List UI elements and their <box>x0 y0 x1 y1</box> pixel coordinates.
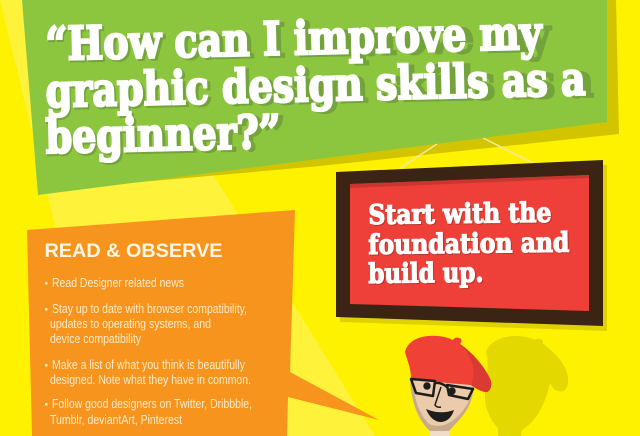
light ray background <box>0 0 375 436</box>
panel: framed red sign <box>336 160 607 331</box>
sign text: Start with the <box>368 198 552 231</box>
title text <box>45 6 586 164</box>
beret shading <box>460 344 491 392</box>
sign text shadow <box>369 199 571 291</box>
bullet list: Follow good designers on Twitter, Dribbble, <box>52 396 252 411</box>
sign text: foundation and <box>368 228 570 261</box>
bullet list: Tumblr, deviantArt, Pinterest <box>50 412 182 427</box>
sign text shadow: build up. <box>369 259 485 291</box>
panel: green title banner <box>22 0 607 195</box>
sign text: build up. <box>368 258 484 290</box>
sign text shadow: Start with the <box>369 199 553 232</box>
face <box>410 378 474 436</box>
panel: read and observe speech bubble <box>27 210 379 436</box>
bullet list: updates to operating systems, and <box>50 316 211 331</box>
title shadow: “How can I improve my <box>46 8 552 73</box>
title shadow <box>46 8 594 166</box>
sign text shadow: foundation and <box>369 229 571 262</box>
character shadow <box>485 336 568 436</box>
bullet list: Make a list of what you think is beautifully <box>52 357 245 372</box>
eyes <box>423 382 431 390</box>
bullet list: designed. Note what they have in common. <box>50 372 251 387</box>
title text: beginner?” <box>45 105 281 164</box>
character: designer in beret <box>405 336 491 436</box>
beret <box>405 336 491 392</box>
bullet list: Stay up to date with browser compatibility, <box>52 301 247 316</box>
sign text <box>368 198 570 290</box>
title text: “How can I improve my <box>45 6 543 71</box>
bullet list <box>45 275 252 427</box>
heading: READ & OBSERVE <box>44 241 222 262</box>
title shadow: beginner?” <box>46 107 286 166</box>
neck <box>430 431 449 436</box>
glasses <box>411 379 473 399</box>
bullet list: Read Designer related news <box>52 275 184 290</box>
bullet list: device compatibility <box>50 331 141 346</box>
nose <box>435 387 441 407</box>
banner shadow <box>130 0 619 183</box>
mouth <box>426 409 454 422</box>
hanging strings <box>400 138 533 168</box>
